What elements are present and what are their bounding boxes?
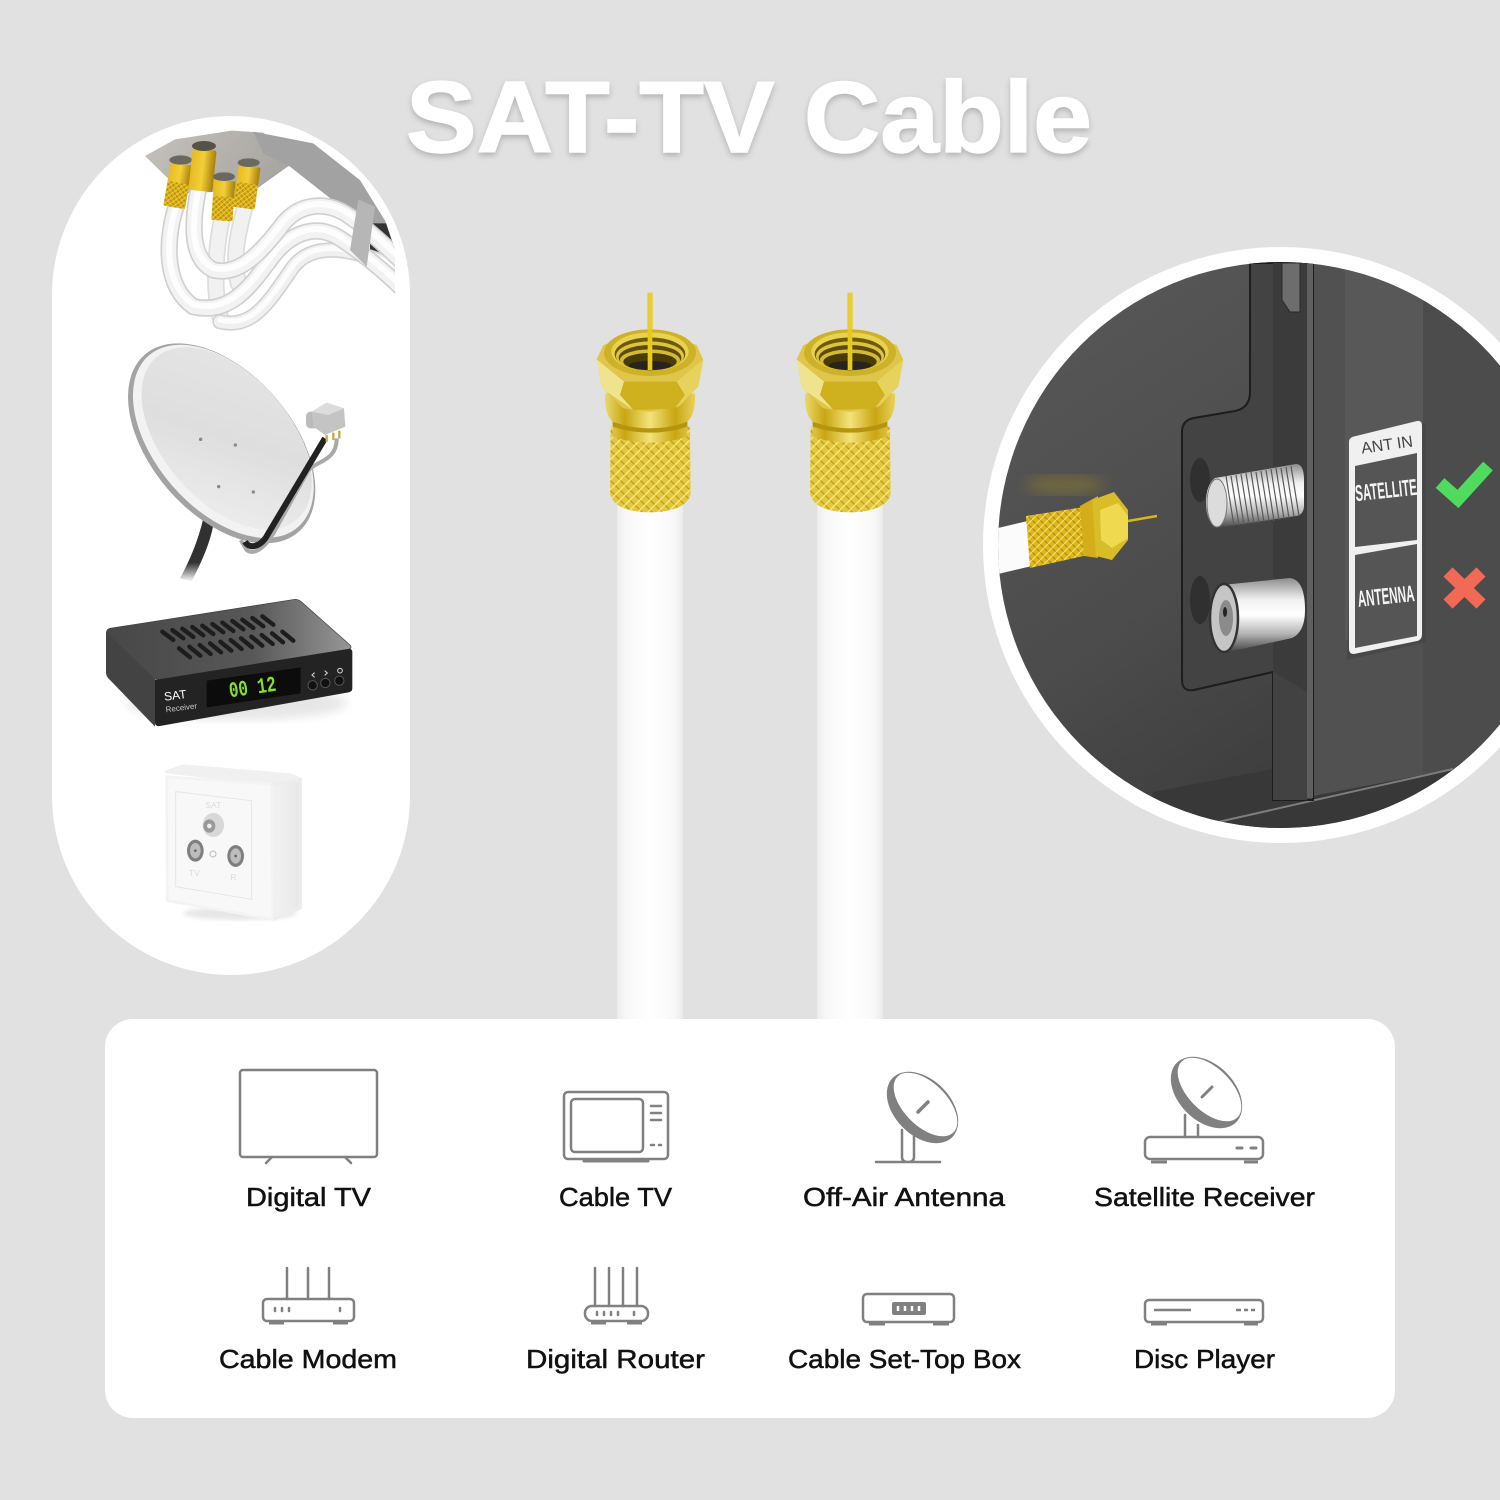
item: Cable Set-Top Box: Cable Set-Top Box [788,1344,1021,1374]
ANT IN text: ANT IN [1360,433,1414,458]
photo: SAT receiver [106,599,352,727]
gold F-connector on white cable [998,476,1157,574]
socket labels [189,800,236,882]
item: Disc Player: Disc Player [1134,1344,1275,1374]
coaxial antenna socket [1210,578,1305,652]
icon: green check [1440,466,1488,499]
panel: TV port close-up [983,247,1500,843]
receiver brand text [163,686,198,714]
connector left [597,293,703,512]
receiver brand text: SAT [163,687,188,704]
cable right [817,500,883,1020]
receiver brand text: Receiver [165,701,198,714]
TV back photo [990,255,1500,840]
panel: compatible devices [105,1019,1395,1418]
item: Cable TV [559,1092,673,1212]
title: SAT-TV Cable [406,62,1092,174]
socket labels: TV [189,868,200,878]
SATELLITE text: SATELLITE [1354,474,1418,506]
panel: application photos pill [52,116,410,975]
item: Cable Modem: Cable Modem [219,1344,397,1374]
item: Disc Player [1134,1300,1275,1374]
cable left [617,500,683,1020]
icon: red cross [1448,572,1481,604]
sockets [187,813,244,867]
ANTENNA text: ANTENNA [1356,580,1416,612]
photo: LNB with white cables [145,131,403,323]
photo: wall antenna socket [167,766,301,920]
socket labels: SAT [205,800,222,810]
item: Digital Router: Digital Router [526,1344,705,1374]
connector right [797,293,903,512]
item: Satellite Receiver: Satellite Receiver [1094,1182,1315,1212]
threaded satellite socket [1206,464,1304,528]
receiver buttons [308,676,344,690]
item: Digital Router [526,1268,705,1374]
item: Cable Set-Top Box [788,1294,1021,1374]
item: Satellite Receiver [1094,1043,1315,1212]
item: Digital TV [240,1070,377,1212]
display digits: 00 12 [227,673,278,704]
item: Digital TV: Digital TV [246,1182,372,1212]
item: Cable TV: Cable TV [559,1182,673,1212]
socket labels: R [230,872,236,882]
photo: satellite dish [91,308,352,582]
item: Off-Air Antenna: Off-Air Antenna [803,1182,1006,1212]
item: Off-Air Antenna [803,1058,1006,1212]
item: Cable Modem [219,1268,397,1374]
label plate [1347,421,1426,660]
